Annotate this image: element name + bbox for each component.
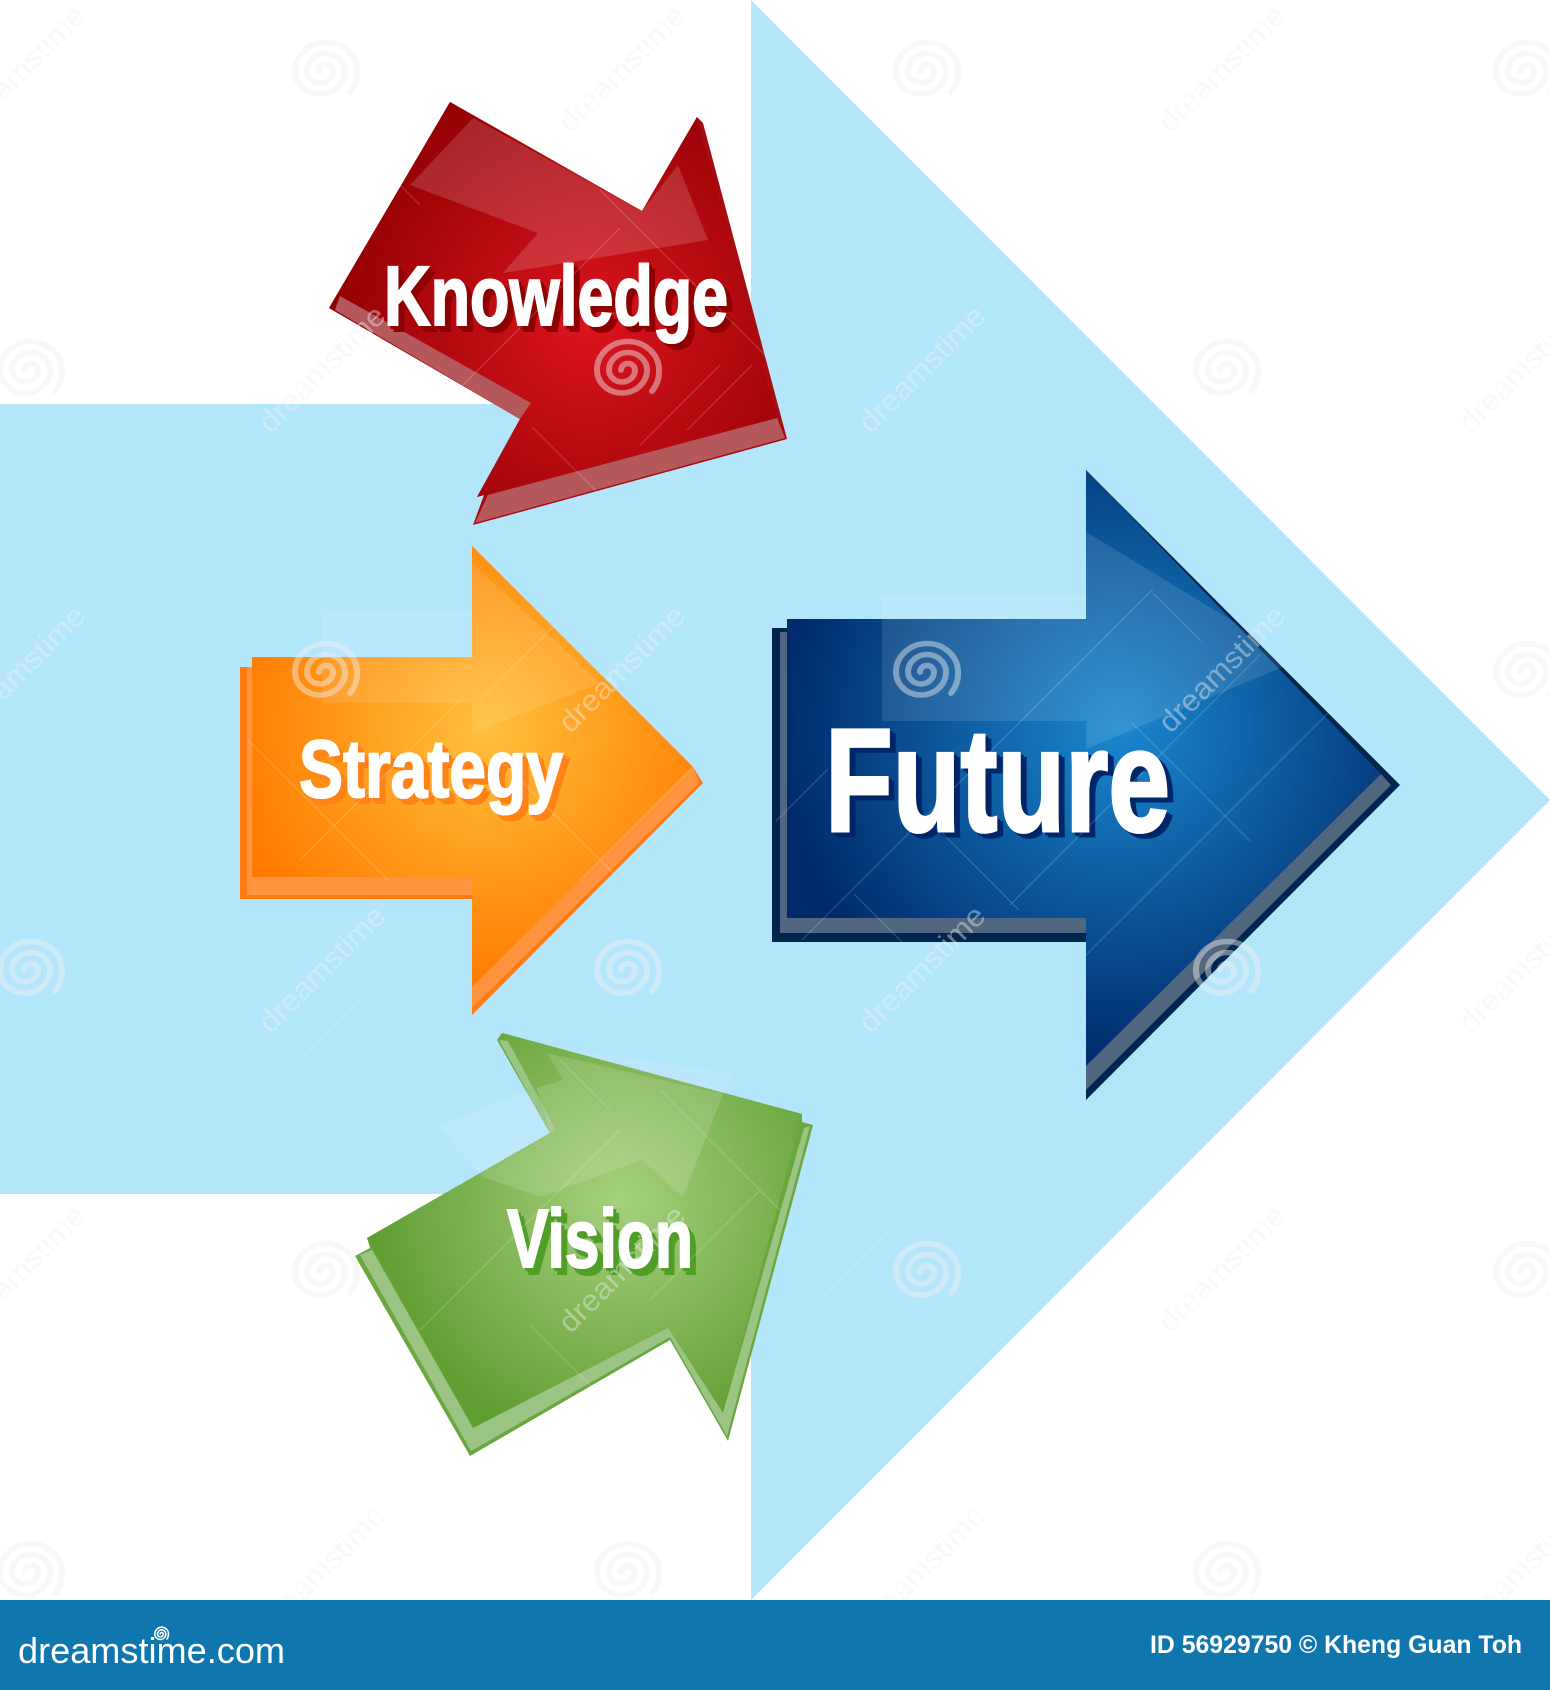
arrow: Strategy	[240, 546, 703, 1015]
watermark text: dreamstime	[852, 899, 992, 1039]
watermark text: dreamstime	[552, 599, 692, 739]
watermark text: dreamstime	[1152, 1199, 1292, 1339]
label: Future: Future	[825, 699, 1170, 863]
footer logo text: dreamstime.com	[18, 1630, 285, 1671]
footer logo spiral	[155, 1627, 168, 1640]
footer bar	[0, 1600, 1550, 1690]
watermark text: dreamstime	[252, 899, 392, 1039]
watermark text: dreamstime	[852, 299, 992, 439]
label: Knowledge: Knowledge	[384, 249, 728, 343]
footer credit: ID 56929750 © Kheng Guan Toh	[1150, 1631, 1522, 1659]
watermark lines	[60, 170, 1331, 1400]
arrow: Future	[772, 470, 1400, 1100]
label: Vision: Vision	[507, 1192, 693, 1285]
watermark text: dreamstime	[552, 0, 692, 139]
watermark text: dreamstime	[252, 1499, 392, 1639]
watermark text: dreamstime	[1152, 599, 1292, 739]
watermark text: dreamstime	[552, 1199, 692, 1339]
arrow: Knowledge	[329, 102, 787, 525]
arrow: Vision	[355, 1033, 813, 1456]
watermark text: dreamstime	[1152, 0, 1292, 139]
watermark text: dreamstime	[852, 1499, 992, 1639]
watermark text: dreamstime	[252, 299, 392, 439]
label: Strategy: Strategy	[299, 724, 563, 815]
